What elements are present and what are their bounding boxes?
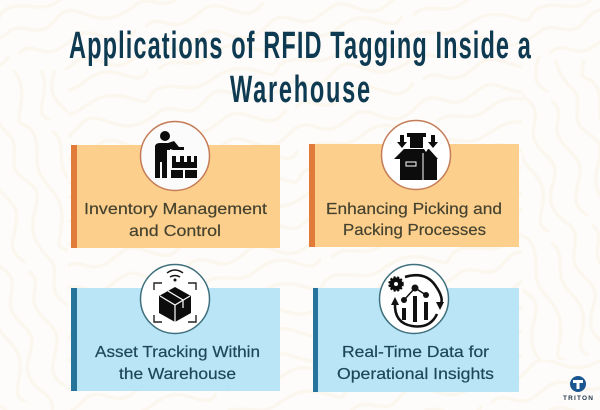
logo: Triton: TRITON: [563, 395, 593, 402]
icon: data chart with gear: [380, 264, 448, 334]
label: Real-Time Data for: [342, 344, 490, 361]
panel: inventory management: and Control: [129, 223, 221, 240]
title: Warehouse: [230, 67, 370, 110]
panel: picking and packing: Packing Processes: [343, 222, 486, 239]
title: Applications of RFID Tagging Inside a: [69, 23, 531, 66]
label: Enhancing Picking and: [326, 201, 502, 218]
panel: real-time data: Operational Insights: [337, 366, 494, 383]
icon: worker with boxes: [140, 122, 210, 190]
icon: open box with arrows: [382, 120, 450, 190]
panel: inventory management: [71, 122, 280, 248]
logo: Triton: [563, 376, 593, 402]
icon: tracked parcel: [140, 264, 210, 334]
title: [69, 23, 531, 110]
panel: real-time data: [313, 264, 519, 392]
panel: picking and packing: [309, 120, 519, 247]
label: Asset Tracking Within: [95, 344, 260, 361]
panel: asset tracking: [71, 264, 280, 391]
label: Inventory Management: [84, 201, 268, 218]
panel: asset tracking: the Warehouse: [119, 366, 236, 383]
